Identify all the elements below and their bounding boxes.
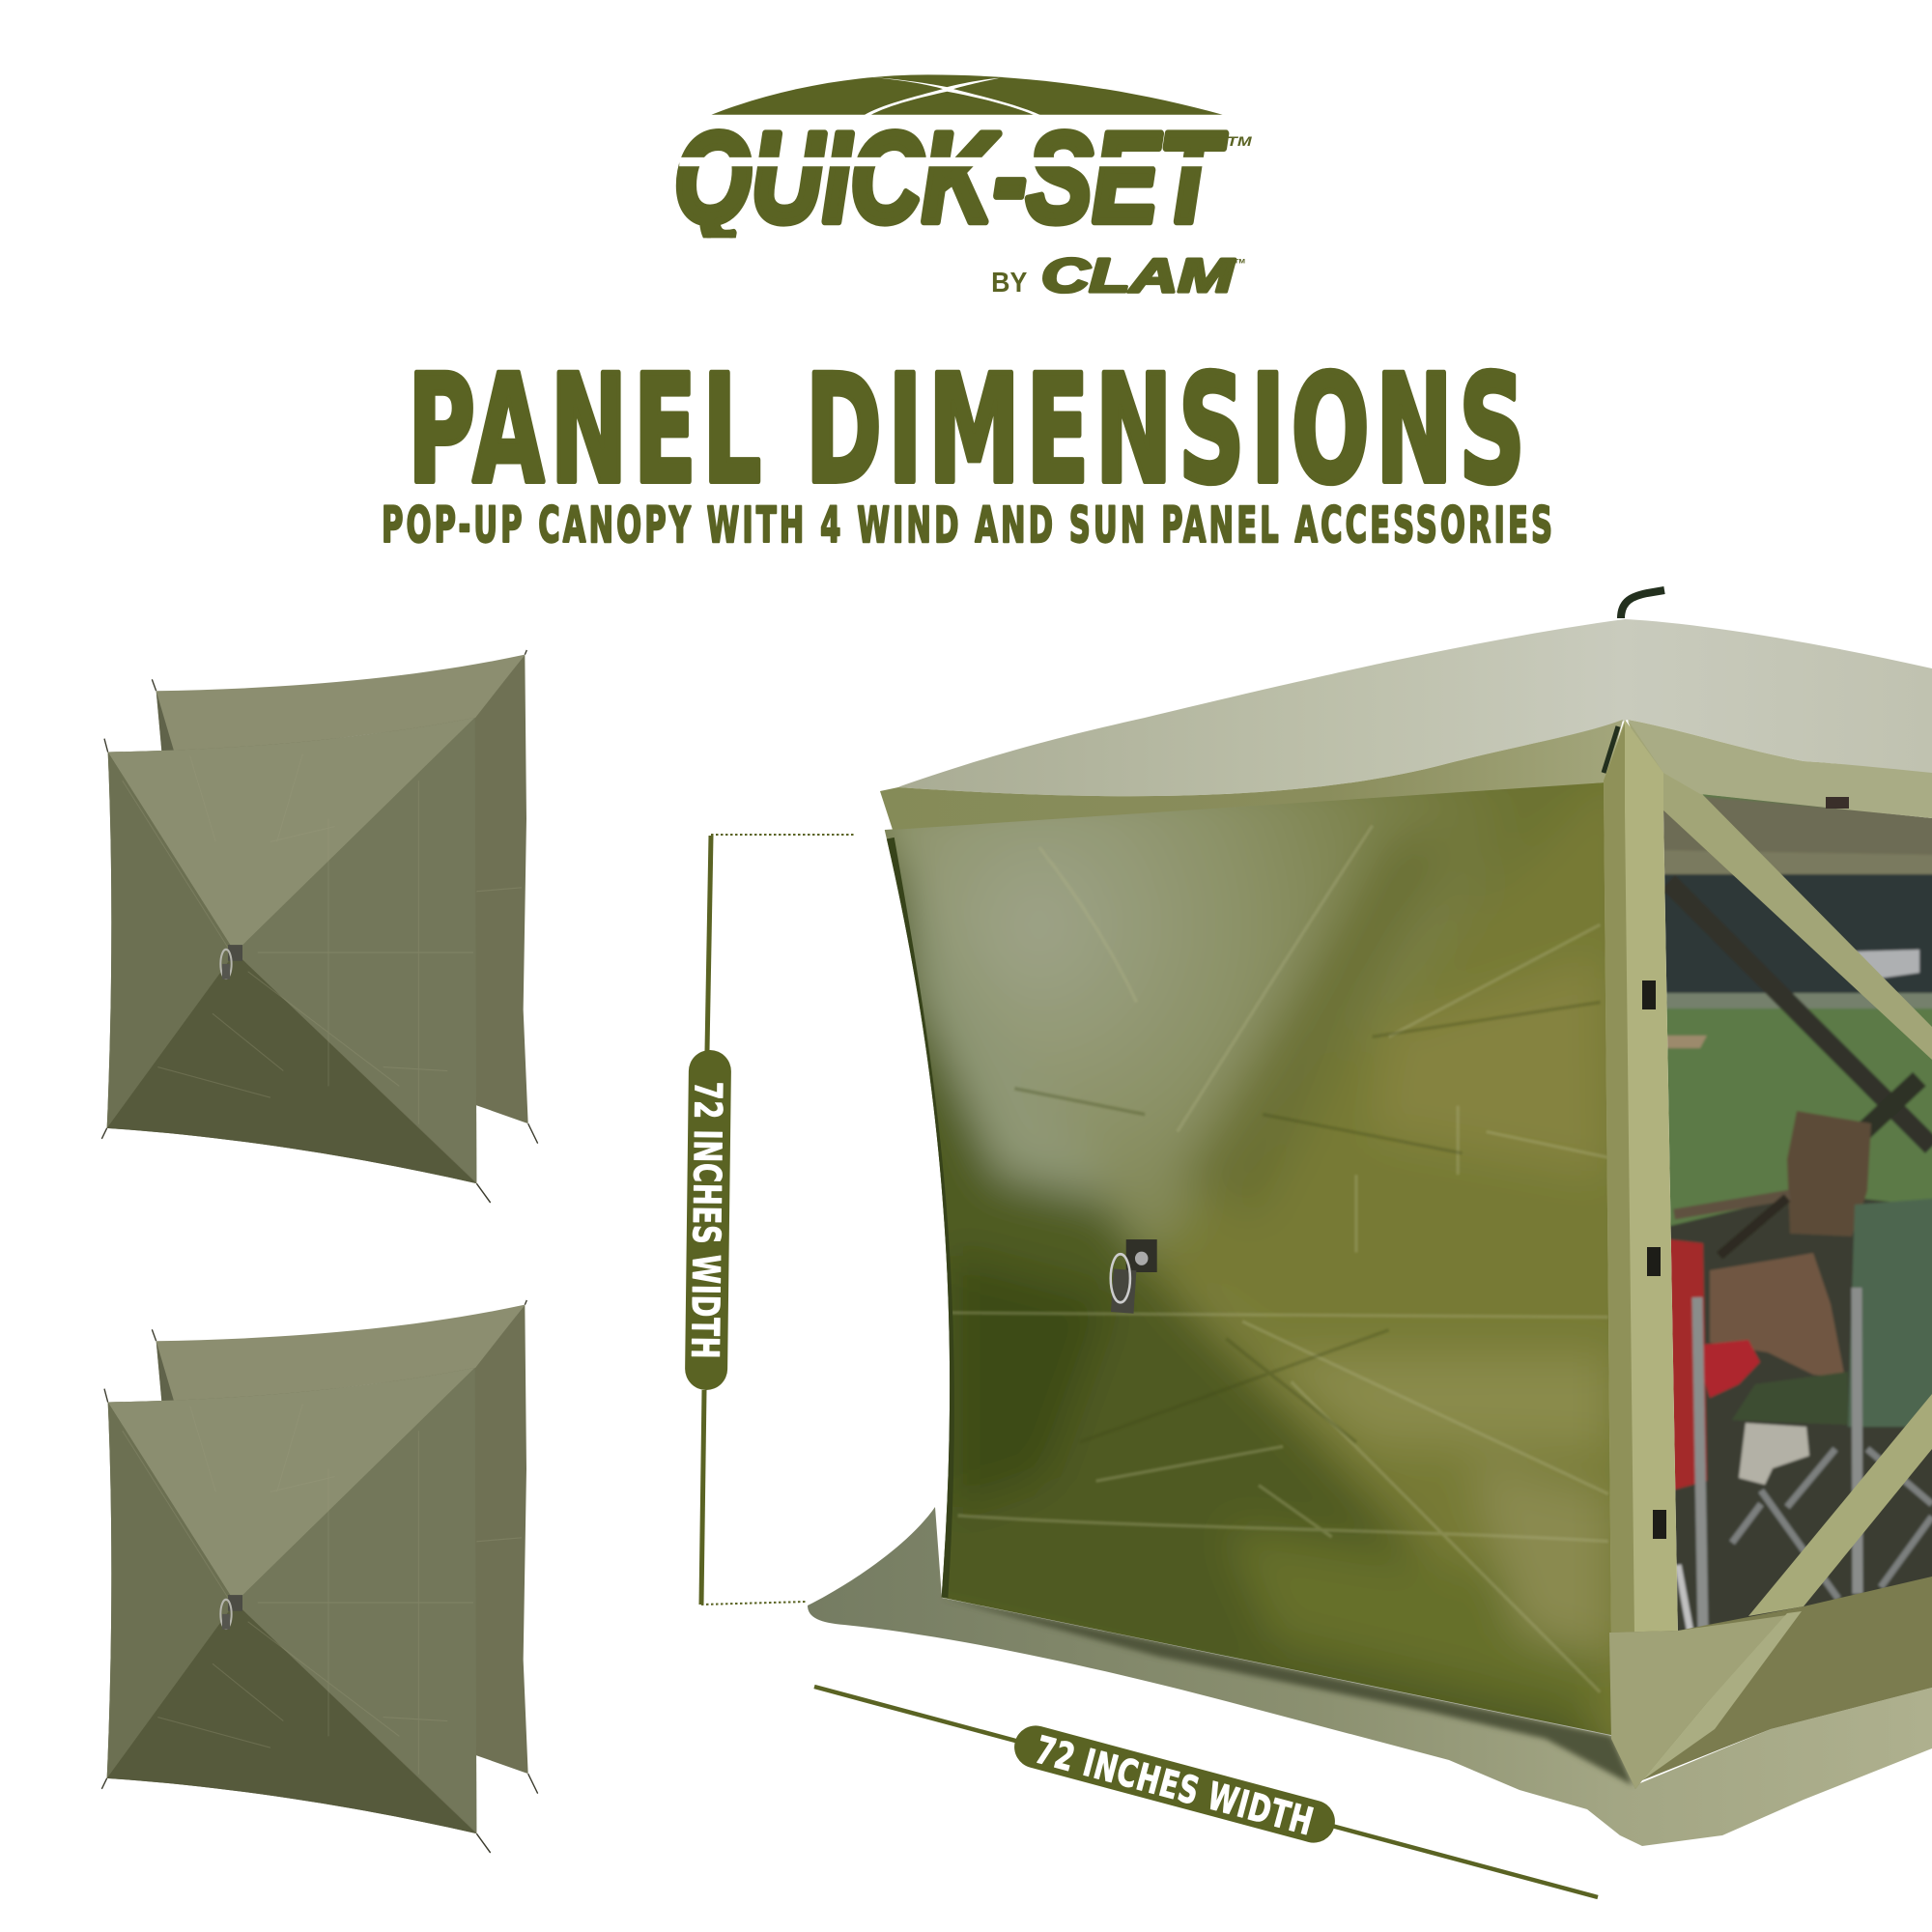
logo canopy dome xyxy=(711,74,1223,115)
panel pair: lower xyxy=(101,1300,538,1853)
logo wordmark: TM xyxy=(1227,135,1253,150)
post toggles xyxy=(1642,980,1666,1539)
horizontal dimension marker xyxy=(814,1687,1598,1897)
panel pair: upper xyxy=(101,650,538,1203)
valance xyxy=(880,720,1623,830)
horizontal pill label: 72 INCHES WIDTH xyxy=(1031,1728,1318,1845)
logo by clam: TM xyxy=(1235,259,1245,265)
logo: Quick-Set by Clam xyxy=(674,74,1253,302)
mesh window scene xyxy=(1652,782,1932,1652)
tent photo illustration xyxy=(808,590,1932,1846)
title: PANEL DIMENSIONS xyxy=(408,344,1525,517)
ground skirt xyxy=(808,1507,1932,1846)
corner post xyxy=(1604,720,1678,1642)
vertical dimension lines xyxy=(701,835,856,1605)
logo by clam: BY xyxy=(991,268,1027,298)
front panel xyxy=(885,782,1611,1735)
diagonal mesh strap lower xyxy=(1748,1394,1932,1616)
shadow under panel xyxy=(942,1598,1633,1785)
centre tie strap xyxy=(1111,1239,1157,1314)
logo wordmark xyxy=(676,128,1252,238)
right valance xyxy=(1628,720,1932,818)
horizontal dimension line xyxy=(814,1687,1598,1897)
logo by clam: CLAM xyxy=(1041,249,1235,302)
vertical dimension marker xyxy=(683,835,856,1605)
diagonal mesh strap upper xyxy=(1628,721,1932,1060)
valance tab xyxy=(1826,797,1849,809)
top hook xyxy=(1621,590,1664,618)
lower corner panel xyxy=(1609,1577,1932,1789)
roof xyxy=(898,619,1932,796)
subtitle: POP-UP CANOPY WITH 4 WIND AND SUN PANEL ACCESSORIES xyxy=(382,497,1552,554)
logo wordmark: QUICK-SET xyxy=(674,105,1226,248)
vertical pill label: 72 INCHES WIDTH xyxy=(683,1081,730,1359)
